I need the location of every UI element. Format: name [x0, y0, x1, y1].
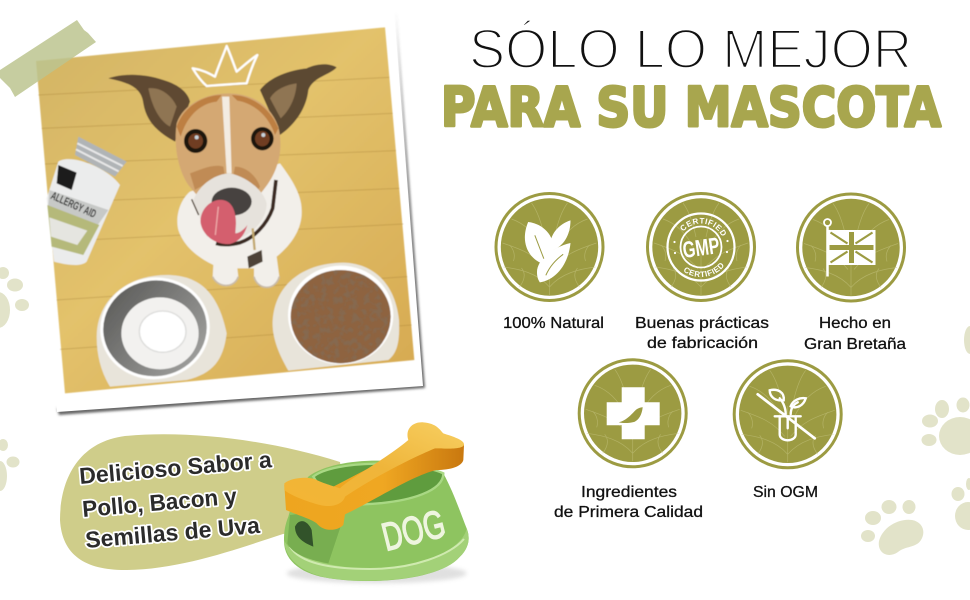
label: Buenas prácticas — [635, 315, 769, 332]
badge: no GMO — [734, 361, 841, 501]
callout text: Delicioso Sabor a — [78, 446, 273, 489]
icon: cross with leaf — [607, 387, 660, 439]
badge: 100% natural — [496, 194, 604, 332]
label: 100% Natural — [503, 315, 604, 332]
eyes — [184, 129, 207, 153]
empty bowl — [97, 275, 227, 387]
icon: GMP stamp: CERTIFIED — [684, 263, 724, 278]
dog photograph — [36, 27, 414, 393]
badge: quality ingredients — [554, 360, 703, 521]
muzzle — [193, 173, 267, 237]
background paw prints — [0, 267, 970, 555]
right ear — [260, 64, 337, 135]
callout text — [78, 446, 273, 553]
label: de Primera Calidad — [554, 504, 703, 521]
label: Gran Bretaña — [804, 336, 906, 353]
label — [554, 484, 703, 521]
title — [441, 17, 941, 139]
icon: GMP stamp: CERTIFIED — [680, 218, 726, 236]
callout text: Semillas de Uva — [84, 512, 261, 553]
dog bowl with bone — [284, 422, 469, 583]
badge: GMP — [635, 192, 769, 352]
crown — [193, 46, 257, 86]
icon: GMP stamp — [666, 212, 736, 282]
supplement bottle — [47, 137, 127, 265]
collar — [216, 180, 276, 245]
label: Sin OGM — [753, 484, 818, 501]
left ear — [108, 75, 190, 142]
icon: union flag — [824, 219, 876, 276]
badge: made in Britain — [798, 194, 906, 353]
bone — [284, 445, 464, 530]
label: Ingredientes — [581, 484, 677, 501]
tape — [0, 20, 96, 97]
body — [177, 163, 302, 288]
dog — [108, 64, 337, 288]
label: Hecho en — [819, 315, 891, 332]
title line 1: SÓLO LO MEJOR — [469, 17, 912, 80]
flavour callout blob — [60, 434, 350, 570]
label — [804, 315, 906, 353]
tongue — [201, 200, 247, 244]
food bowl — [273, 263, 399, 371]
head — [176, 93, 280, 207]
polaroid card — [20, 11, 425, 415]
bowl — [284, 461, 469, 581]
icon: GMP stamp: GMP — [681, 232, 721, 263]
label — [635, 315, 769, 352]
callout text: Pollo, Bacon y — [81, 483, 238, 522]
bowl lettering: DOG — [378, 502, 450, 560]
label: de fabricación — [647, 335, 758, 352]
icon: leaves — [525, 220, 570, 282]
icon: test tube with sprout, crossed out — [758, 390, 815, 440]
bottle label: ALLERGY AID — [49, 190, 98, 221]
